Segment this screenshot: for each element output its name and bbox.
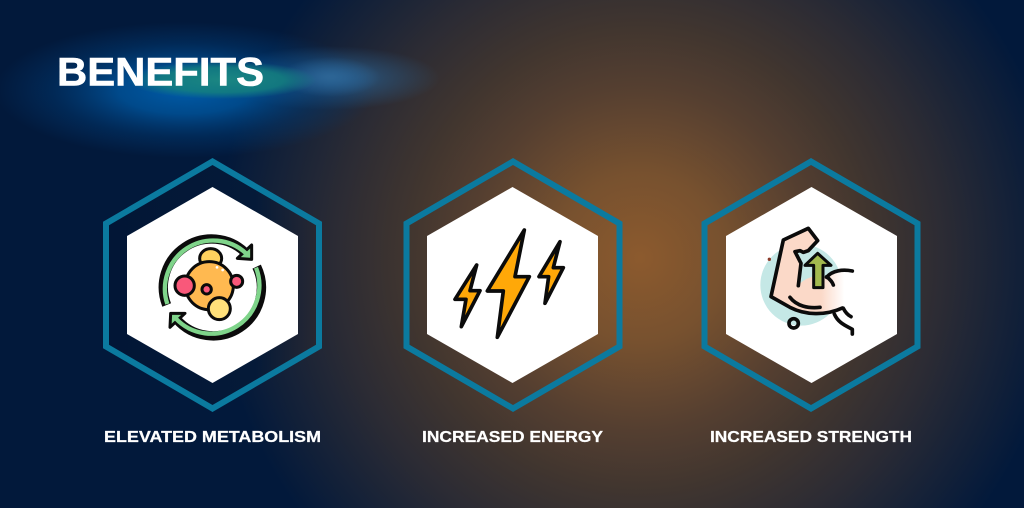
hexagon frame: strength <box>704 162 918 408</box>
hexagon frame: energy <box>406 162 620 408</box>
icon: lightning bolts <box>455 230 563 337</box>
hexagon: metabolism <box>127 187 298 383</box>
panel: elevated metabolism <box>106 162 319 408</box>
title: BENEFITS <box>57 50 264 94</box>
label: increased energy: INCREASED ENERGY <box>422 429 604 446</box>
title glow <box>0 22 440 158</box>
panel: increased energy <box>406 162 620 408</box>
panel: increased strength <box>704 162 918 408</box>
icon: flexed arm <box>760 228 852 334</box>
hexagon frame: metabolism <box>106 162 319 408</box>
hexagon: energy <box>427 187 598 383</box>
icon: metabolism cycle <box>163 239 261 336</box>
label: increased strength: INCREASED STRENGTH <box>710 429 912 446</box>
hexagon: strength <box>726 187 897 383</box>
label: elevated metabolism: ELEVATED METABOLISM <box>104 429 321 446</box>
